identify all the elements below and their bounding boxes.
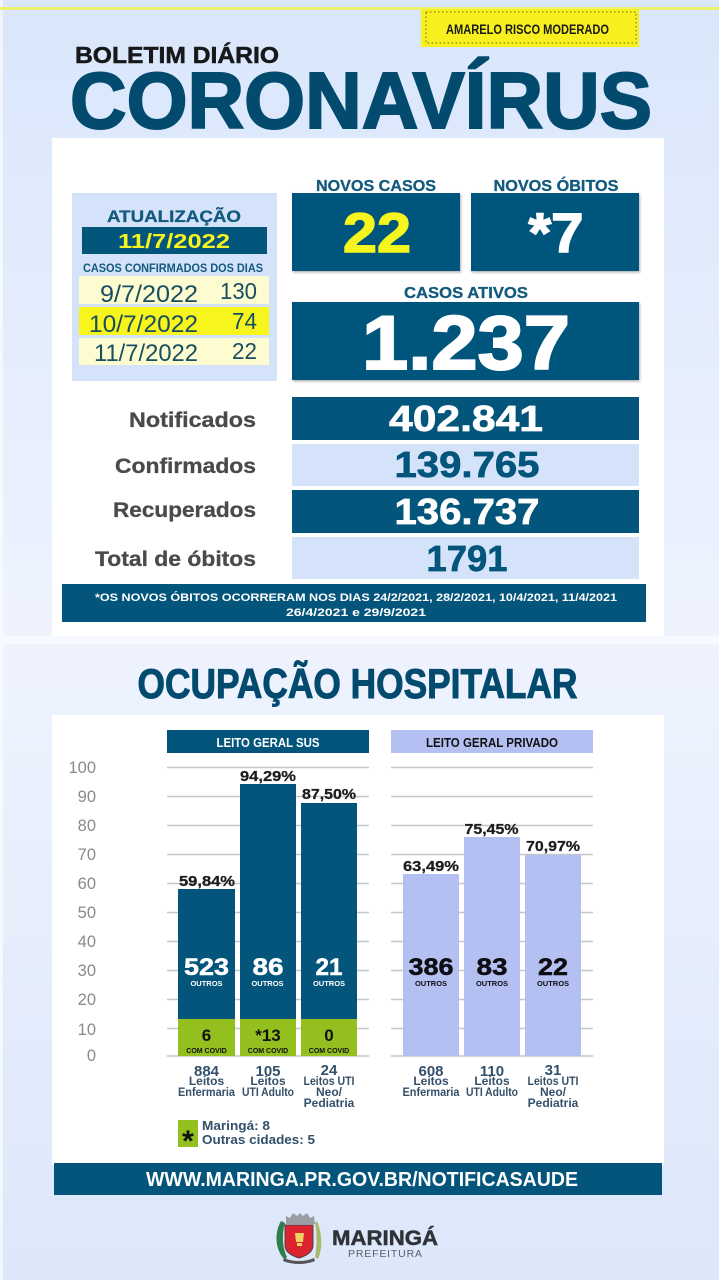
bar: enfermaria SUS: 523: [184, 954, 229, 981]
chart axis: 70: [78, 846, 96, 864]
stat: novos casos: 22: [343, 201, 411, 264]
chart: leito geral SUS: [167, 730, 369, 1110]
stat: novos casos: NOVOS CASOS: [316, 178, 436, 195]
bar: UTI neo privado: OUTROS: [537, 979, 569, 988]
stat: novos obitos: [471, 176, 639, 271]
footnote: new death dates: *OS NOVOS ÓBITOS OCORRERAM NOS DIAS 24/2/2021, 28/2/2021, 10/4/2021, 11/4/2021: [95, 591, 617, 604]
bar: enfermaria SUS: 6: [202, 1026, 211, 1045]
bar: UTI adulto SUS: COM COVID: [248, 1048, 288, 1055]
bar: UTI adulto SUS: 94,29%: [240, 769, 296, 785]
caption: UTI adulto SUS: UTI Adulto: [242, 1085, 294, 1099]
bar: enfermaria SUS: 59,84%: [179, 874, 235, 890]
caption: enfermaria privado: [402, 1063, 460, 1099]
chart axis: 10: [78, 1021, 96, 1039]
row: recuperados: Recuperados: [113, 499, 256, 522]
legend: asterisk note: Maringá: 8: [202, 1119, 270, 1133]
row: 9/7/2022: [79, 276, 269, 308]
bar: UTI adulto privado: [464, 822, 520, 1056]
bar: UTI neo SUS: COM COVID: [309, 1048, 349, 1055]
chart axis: [68, 759, 96, 1065]
panel: hospital occupancy charts: [52, 715, 664, 1165]
caption: UTI neo SUS: 24: [321, 1062, 338, 1079]
row: 11/7/2022: 22: [232, 338, 257, 364]
bar: UTI neo SUS: 21: [316, 954, 342, 981]
alert badge: yellow moderate risk: AMARELO RISCO MODERADO: [446, 22, 609, 37]
bar: enfermaria privado: [403, 859, 459, 1056]
row: total de obitos: 1791: [426, 538, 508, 579]
title: [70, 41, 652, 145]
row: recuperados: 136.737: [394, 491, 540, 532]
caption: UTI neo SUS: Leitos UTI: [304, 1074, 354, 1088]
chart header: privado: LEITO GERAL PRIVADO: [426, 736, 558, 750]
caption: UTI adulto privado: [466, 1063, 518, 1099]
caption: UTI neo privado: Neo/: [540, 1085, 567, 1099]
bar: UTI adulto privado: OUTROS: [476, 979, 508, 988]
chart header: SUS: LEITO GERAL SUS: [216, 736, 320, 750]
bar: enfermaria SUS: [178, 874, 235, 1056]
footer banner: website: [54, 1163, 662, 1195]
label: confirmed cases by day: CASOS CONFIRMADOS DOS DIAS: [83, 263, 263, 275]
bar: UTI adulto SUS: [240, 769, 296, 1056]
chart axis: 100: [68, 759, 96, 777]
caption: UTI neo privado: Pediatria: [528, 1096, 579, 1110]
row: confirmados: [115, 444, 639, 486]
chart axis: 50: [78, 904, 96, 922]
chart axis: 60: [78, 875, 96, 893]
caption: enfermaria SUS: [178, 1063, 235, 1099]
update date: 11/7/2022: [118, 231, 230, 253]
legend: asterisk note: *: [182, 1125, 194, 1158]
heading: coronavirus: CORONAVÍRUS: [70, 56, 652, 145]
caption: enfermaria SUS: Leitos: [189, 1074, 224, 1088]
caption: UTI adulto privado: 110: [480, 1063, 504, 1080]
row: notificados: Notificados: [129, 409, 256, 432]
bar: UTI neo privado: 22: [538, 954, 568, 981]
caption: UTI neo SUS: Pediatria: [304, 1096, 355, 1110]
row: recuperados: [113, 490, 639, 533]
caption: UTI adulto SUS: 105: [255, 1063, 281, 1080]
bar: UTI adulto privado: 83: [476, 954, 508, 981]
chart axis: 20: [78, 991, 96, 1009]
bar: UTI neo privado: [525, 839, 581, 1056]
stat: novos obitos: NOVOS ÓBITOS: [494, 176, 619, 195]
bar: enfermaria SUS: COM COVID: [186, 1048, 227, 1055]
row: notificados: 402.841: [389, 398, 543, 439]
row: 9/7/2022: 9/7/2022: [100, 281, 198, 308]
row: 10/7/2022: 10/7/2022: [89, 311, 198, 338]
heading: boletim diario: BOLETIM DIÁRIO: [75, 41, 279, 68]
chart header: privado: [391, 730, 593, 753]
row: confirmados: 139.765: [394, 444, 540, 485]
caption: UTI adulto SUS: Leitos: [250, 1074, 286, 1088]
caption: UTI neo privado: 31: [545, 1062, 561, 1079]
footnote: new death dates: 26/4/2021 e 29/9/2021: [286, 607, 426, 619]
caption: enfermaria privado: Enfermaria: [402, 1085, 460, 1099]
alert badge: yellow moderate risk: [421, 9, 639, 47]
bar: UTI neo SUS: OUTROS: [313, 979, 345, 988]
icon: city coat of arms: [276, 1213, 321, 1264]
caption: UTI neo SUS: Neo/: [316, 1085, 343, 1099]
heading: atualizacao: ATUALIZAÇÃO: [107, 206, 241, 226]
wordmark: MARINGÁ: [332, 1227, 438, 1250]
caption: UTI neo privado: [528, 1062, 579, 1110]
chart axis: 30: [78, 962, 96, 980]
bar: UTI adulto SUS: OUTROS: [251, 979, 284, 988]
bar: UTI adulto SUS: 86: [252, 954, 284, 981]
row: 11/7/2022: [79, 338, 269, 367]
bar: UTI neo privado: 70,97%: [526, 839, 580, 855]
caption: enfermaria SUS: Enfermaria: [178, 1085, 235, 1099]
bar: UTI neo SUS: 0: [324, 1026, 334, 1045]
stat: casos ativos: [292, 285, 639, 386]
chart axis: 80: [78, 817, 96, 835]
chart: leito geral privado: [391, 730, 593, 1110]
footer banner: website: WWW.MARINGA.PR.GOV.BR/NOTIFICASAUDE: [146, 1169, 578, 1191]
legend: asterisk note: Outras cidades: 5: [202, 1133, 315, 1147]
panel: daily numbers: [52, 138, 664, 636]
stat: novos obitos: *7: [528, 201, 584, 264]
caption: UTI adulto SUS: [242, 1063, 294, 1099]
row: notificados: [129, 397, 639, 440]
row: confirmados: Confirmados: [115, 455, 256, 478]
row: total de obitos: [95, 537, 639, 579]
bar: UTI neo SUS: [301, 787, 357, 1056]
footnote: new death dates: [62, 584, 646, 622]
chart axis: 40: [78, 933, 96, 951]
caption: enfermaria SUS: 884: [194, 1063, 220, 1080]
stat: casos ativos: CASOS ATIVOS: [404, 285, 528, 302]
caption: UTI neo SUS: [304, 1062, 355, 1110]
bar: enfermaria SUS: OUTROS: [190, 979, 223, 988]
bar: UTI neo SUS: 87,50%: [302, 787, 356, 803]
row: 10/7/2022: [79, 307, 269, 338]
logo: Maringá prefeitura: [276, 1213, 438, 1264]
caption: UTI adulto privado: Leitos: [474, 1074, 510, 1088]
row: 9/7/2022: 130: [220, 278, 257, 304]
caption: enfermaria privado: 608: [418, 1063, 444, 1080]
legend: asterisk note: [178, 1119, 315, 1158]
caption: UTI adulto privado: UTI Adulto: [466, 1085, 518, 1099]
heading: hospital occupancy: OCUPAÇÃO HOSPITALAR: [138, 660, 578, 707]
bar: enfermaria privado: 386: [408, 954, 454, 981]
chart axis: 0: [87, 1047, 96, 1065]
update date: [82, 227, 267, 254]
caption: enfermaria privado: Leitos: [413, 1074, 449, 1088]
row: total de obitos: Total de óbitos: [95, 548, 256, 571]
stat: casos ativos: 1.237: [362, 301, 570, 386]
chart axis: 90: [78, 788, 96, 806]
bar: enfermaria privado: 63,49%: [403, 859, 459, 875]
row: 10/7/2022: 74: [232, 308, 257, 334]
bar: enfermaria privado: OUTROS: [415, 979, 447, 988]
bar: UTI adulto SUS: *13: [255, 1026, 281, 1045]
bar: UTI adulto privado: 75,45%: [464, 822, 519, 838]
row: 11/7/2022: 11/7/2022: [94, 340, 198, 367]
chart header: SUS: [167, 730, 369, 753]
wordmark subtitle: PREFEITURA: [348, 1248, 422, 1260]
panel: update dates: [72, 193, 277, 381]
caption: UTI neo privado: Leitos UTI: [528, 1074, 578, 1088]
stat: novos casos: [292, 178, 460, 271]
